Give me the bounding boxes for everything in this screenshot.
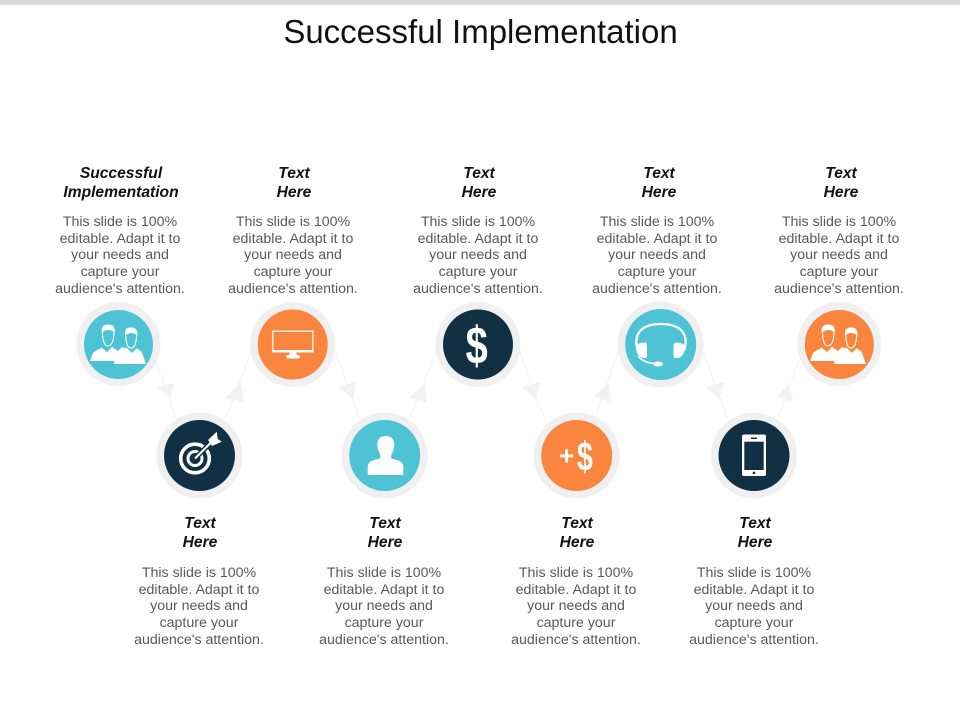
text block: bottom column 4 [689,515,819,648]
text block: bottom column 3: Here [560,534,595,551]
text block: top column 3: Text [463,165,496,182]
arrow: step 7 to 8 [703,352,728,420]
text block: bottom column 1: audience's attention. [134,632,264,648]
text block: top column 2: Text [278,165,311,182]
text block: bottom column 1: editable. Adapt it to [139,582,259,598]
step 4: person icon, teal [342,412,428,498]
icon: two people [90,324,146,364]
icon: plus dollar: + [559,441,574,471]
text block: Successful Implementation: capture your [81,264,160,280]
text block: bottom column 1: your needs and [150,598,248,614]
icon: target with dart [181,432,222,473]
text block: Successful Implementation: Successful [80,165,163,182]
text block: top column 3: your needs and [429,247,527,263]
arrow: step 4 to 5 [409,352,436,418]
top bar [0,0,960,5]
text block: top column 4: Text [643,165,676,182]
text block: bottom column 2: editable. Adapt it to [324,582,444,598]
text block: top column 3: Here [462,184,497,201]
step 7: headset icon, teal [618,302,704,388]
text block: top column 2: Here [277,184,312,201]
icon: person [368,436,403,475]
arrow: step 1 to 2 [156,362,176,418]
text block: bottom column 2 [319,515,449,648]
text block: bottom column 3: This slide is 100% [519,565,634,581]
text block: bottom column 2: This slide is 100% [327,565,442,581]
text block: bottom column 1: This slide is 100% [142,565,257,581]
icon: smartphone [742,434,766,476]
text block: bottom column 3: capture your [537,615,616,631]
step 2: monitor icon, orange [250,302,335,387]
text block: top column 4: your needs and [608,247,706,263]
text block: bottom column 1: Here [183,534,218,551]
text block: top column 3 [413,165,543,297]
icon: plus dollar [559,434,593,480]
text block: top column 2: editable. Adapt it to [233,231,353,247]
text block: bottom column 2: capture your [345,615,424,631]
step 5: dollar icon, navy [436,302,520,387]
text block: top column 4: This slide is 100% [600,214,715,230]
text block: bottom column 3 [511,515,641,648]
step 3: target icon, navy [156,412,242,498]
text block: bottom column 4: editable. Adapt it to [694,582,814,598]
arrow: step 2 to 3 [225,352,251,418]
text block: bottom column 4: Here [738,534,773,551]
icon: headset [636,324,686,366]
arrow: step 6 to 7 [593,352,618,418]
text block: top column 5: your needs and [790,247,888,263]
text block: top column 2: capture your [254,264,333,280]
text block: bottom column 1: capture your [160,615,239,631]
text block: top column 3: editable. Adapt it to [418,231,538,247]
text block: top column 3: capture your [439,264,518,280]
text block: bottom column 3: Text [561,515,594,532]
text block: top column 5: audience's attention. [774,281,904,297]
text block: top column 2: audience's attention. [228,281,358,297]
text block: top column 5: This slide is 100% [782,214,897,230]
title: Successful Implementation [283,13,678,50]
text block: top column 4: Here [642,184,677,201]
icon: plus dollar: $ [577,434,593,480]
text block: top column 4: capture your [618,264,697,280]
text block: top column 5: capture your [800,264,879,280]
text block: top column 4: audience's attention. [592,281,722,297]
text block: top column 5: editable. Adapt it to [779,231,899,247]
text block: bottom column 2: your needs and [335,598,433,614]
text block: bottom column 3: your needs and [527,598,625,614]
text block: top column 3: audience's attention. [413,281,543,297]
text block: Successful Implementation [55,165,185,297]
step 9: people icon, orange [797,302,881,386]
text block: top column 5: Here [824,184,859,201]
step 6: plus dollar icon, orange [534,412,620,498]
text block: bottom column 1: Text [184,515,217,532]
text block: bottom column 4: capture your [715,615,794,631]
text block: Successful Implementation: editable. Adapt it to [60,231,180,247]
arrow: step 5 to 6 [520,352,546,422]
arrow: step 3 to 4 [335,350,359,418]
text block: top column 5 [774,165,904,297]
text block: bottom column 1 [134,515,264,648]
text block: bottom column 4: This slide is 100% [697,565,812,581]
text block: Successful Implementation: your needs and [71,247,169,263]
text block: bottom column 4: Text [739,515,772,532]
text block: top column 2 [228,165,358,297]
text block: top column 5: Text [825,165,858,182]
text block: bottom column 3: editable. Adapt it to [516,582,636,598]
text block: Successful Implementation: Implementation [63,184,179,201]
text block: bottom column 4: audience's attention. [689,632,819,648]
text block: Successful Implementation: audience's attention. [55,281,185,297]
icon: two people [810,324,866,364]
icon: monitor [272,331,314,358]
text block: top column 4: editable. Adapt it to [597,231,717,247]
text block: top column 4 [592,165,722,297]
text block: bottom column 4: your needs and [705,598,803,614]
text block: bottom column 3: audience's attention. [511,632,641,648]
text block: bottom column 2: Here [368,534,403,551]
text block: bottom column 2: audience's attention. [319,632,449,648]
text block: top column 2: your needs and [244,247,342,263]
text block: Successful Implementation: This slide is 100% [63,214,178,230]
text block: top column 2: This slide is 100% [236,214,351,230]
step 1: people icon, teal [76,302,160,386]
step 8: smartphone icon, navy [711,412,797,498]
icon: dollar sign: $ [466,316,488,375]
arrow: step 8 to 9 [777,358,800,418]
text block: top column 3: This slide is 100% [421,214,536,230]
text block: bottom column 2: Text [369,515,402,532]
